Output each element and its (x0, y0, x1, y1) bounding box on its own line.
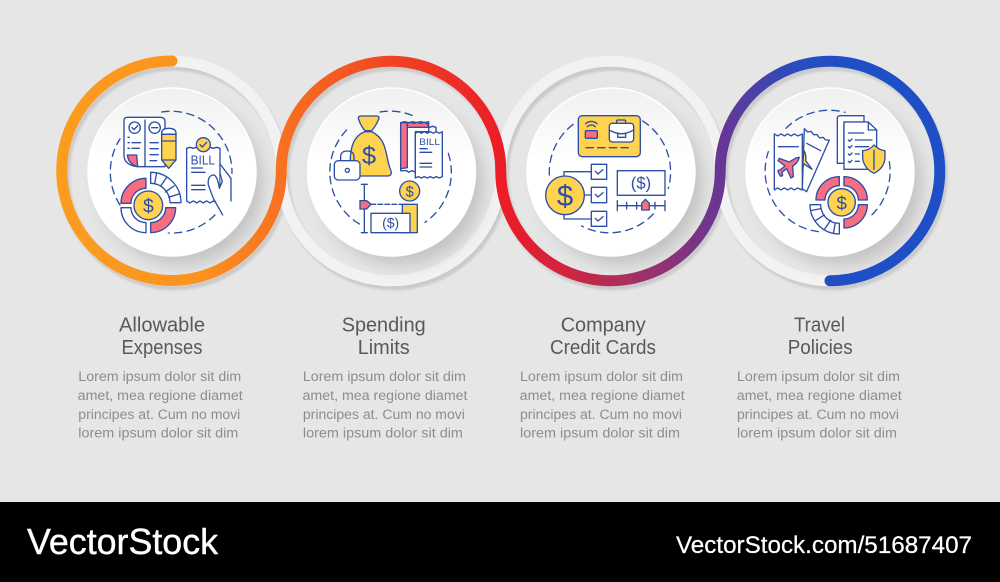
footer bar (0, 502, 1000, 582)
step 3 body text: lorem ipsum dolor sit dim (520, 426, 680, 442)
step 3 heading: Company (561, 314, 646, 336)
icon: spending limits: $ (406, 184, 414, 200)
step 1 body text (78, 369, 243, 442)
disc shadows (99, 101, 922, 265)
icon: spending limits: BILL (419, 137, 440, 147)
step 1 body text: lorem ipsum dolor sit dim (78, 426, 238, 442)
step 1 heading: Expenses (122, 337, 202, 359)
icon: spending limits (330, 111, 451, 233)
icon: spending limits: ($) (382, 215, 399, 231)
icon: company credit cards: ($) (631, 173, 651, 192)
ring shadows (64, 65, 942, 285)
step 1 body text: amet, mea regione diamet (78, 388, 243, 404)
icon: travel policies (765, 110, 890, 234)
step 2 body text: lorem ipsum dolor sit dim (303, 426, 463, 442)
footer bar: VectorStock (27, 521, 219, 562)
icon: company credit cards: $ (557, 180, 573, 213)
icon: travel policies: $ (836, 192, 847, 213)
step 1 body text: principes at. Cum no movi (78, 407, 240, 423)
step 2 heading (342, 314, 426, 359)
step 2 body text: principes at. Cum no movi (303, 407, 465, 423)
step 4 body text: amet, mea regione diamet (737, 388, 902, 404)
white discs (88, 88, 914, 256)
step 1 body text: Lorem ipsum dolor sit dim (78, 369, 241, 385)
step 1 heading (119, 314, 205, 359)
icon: allowable expenses: BILL (191, 152, 215, 167)
step 3 body text: Lorem ipsum dolor sit dim (520, 369, 683, 385)
step 3 body text (520, 369, 685, 442)
step 2 body text: amet, mea regione diamet (302, 388, 468, 404)
step 1 heading: Allowable (119, 314, 205, 336)
footer bar: VectorStock.com/51687407 (676, 532, 972, 559)
step 3 heading (550, 314, 656, 359)
step 3 body text: amet, mea regione diamet (520, 388, 685, 404)
step 3 heading: Credit Cards (550, 337, 656, 359)
light base rings (62, 61, 940, 281)
icon: allowable expenses (110, 111, 232, 233)
gradient ribbon connecting the four steps (62, 61, 940, 281)
icon: company credit cards (546, 116, 671, 233)
step 2 body text (302, 369, 468, 442)
step 4 heading: Policies (788, 337, 853, 359)
step 4 body text: Lorem ipsum dolor sit dim (737, 369, 900, 385)
icon: spending limits: $ (362, 142, 376, 170)
step 4 heading (788, 314, 853, 359)
step 4 body text: lorem ipsum dolor sit dim (737, 426, 897, 442)
step 2 body text: Lorem ipsum dolor sit dim (303, 369, 466, 385)
step 4 heading: Travel (794, 314, 845, 336)
step 3 body text: principes at. Cum no movi (520, 407, 682, 423)
step 2 heading: Spending (342, 314, 426, 336)
icon: allowable expenses: $ (143, 196, 154, 217)
step 4 body text (737, 369, 902, 442)
step 2 heading: Limits (358, 337, 410, 359)
step 4 body text: principes at. Cum no movi (737, 407, 899, 423)
